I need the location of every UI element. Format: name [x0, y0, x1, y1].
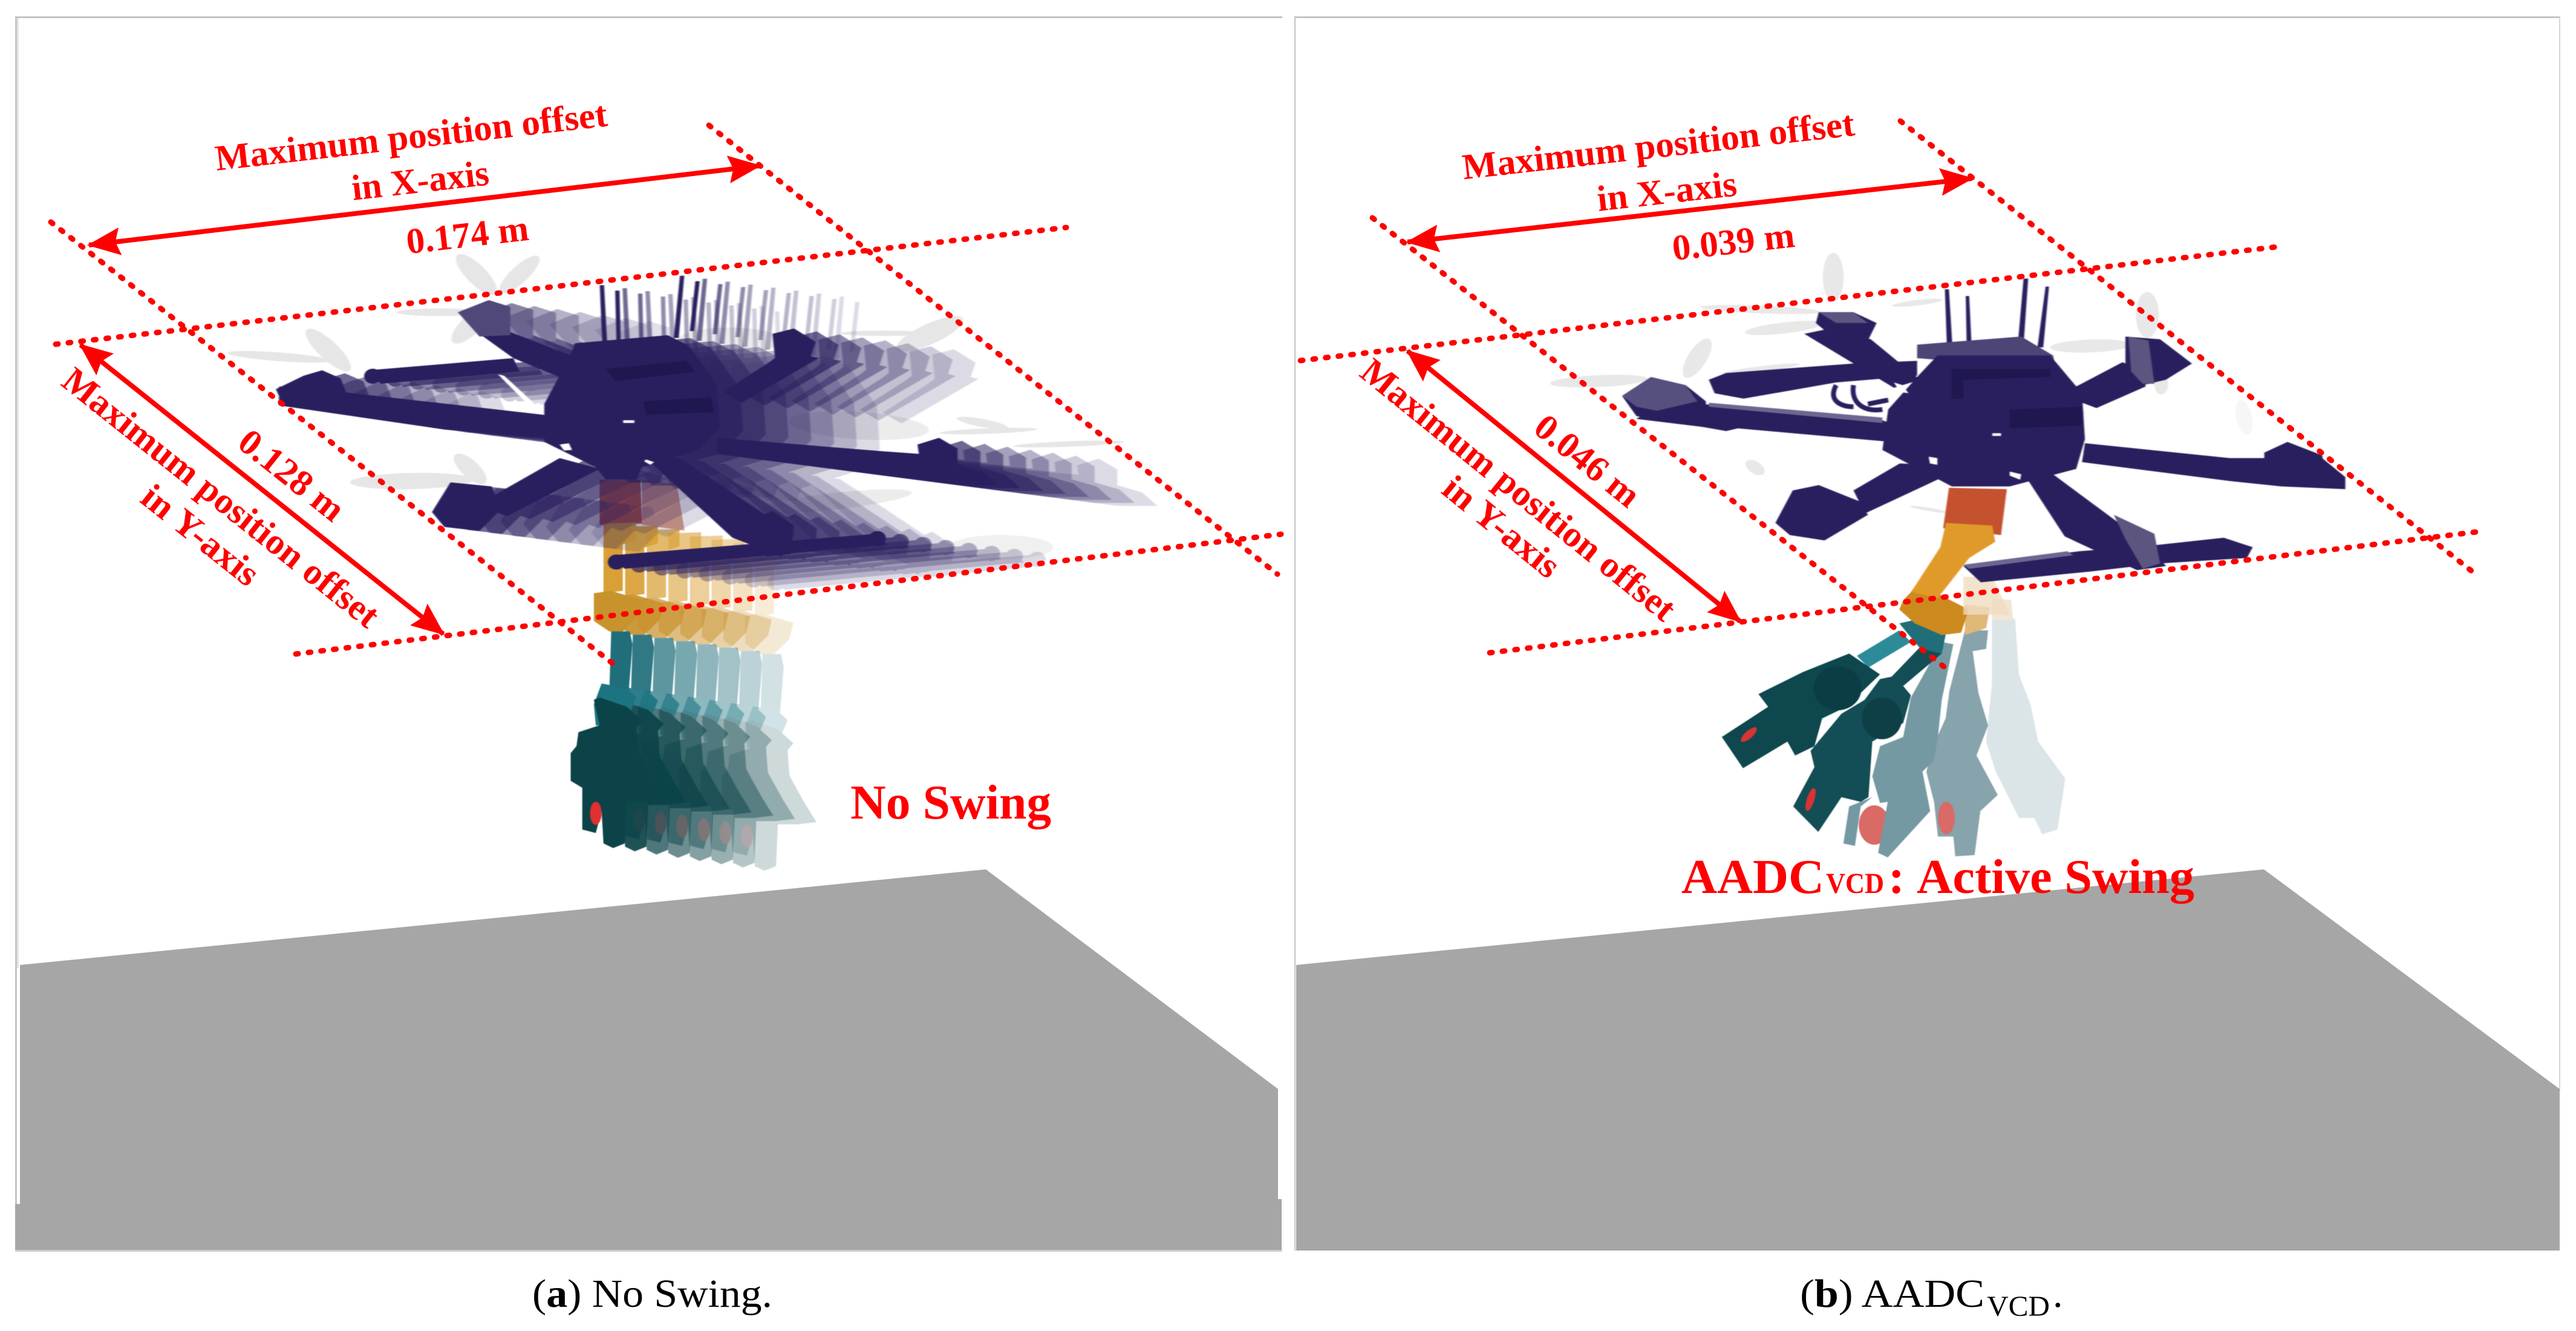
propeller blades b — [1548, 253, 2255, 514]
label: X offset a: Maximum position offset — [213, 94, 609, 178]
label: X offset a: in X-axis — [350, 152, 491, 208]
caption b: . — [2053, 1272, 2062, 1316]
label: X offset b: Maximum position offset — [1460, 103, 1856, 187]
arrow: Y offset b — [1407, 351, 1740, 621]
label: AADC VCD Active Swing: VCD — [1826, 868, 1884, 900]
gold joint — [1899, 584, 1969, 635]
frame 1 link — [1857, 630, 1911, 667]
arrow: X offset b — [1407, 178, 1972, 242]
label: Y offset a: 0.128 m — [231, 421, 353, 529]
arrow: X offset a — [89, 166, 760, 245]
robotic arm a: swing frames — [571, 480, 817, 871]
caption b: VCD — [1987, 1290, 2050, 1323]
frame 3 ball — [1859, 805, 1890, 845]
label: Y offset b: 0.046 m — [1527, 406, 1648, 515]
frame 3 — [1873, 642, 1954, 857]
caption b — [1800, 1272, 2062, 1323]
label: Y offset a: Maximum position offset — [55, 359, 387, 635]
label: AADC VCD Active Swing: AADC — [1681, 849, 1824, 904]
ground plane a — [15, 869, 1282, 1250]
arrow: Y offset a — [80, 345, 443, 634]
frame 5 pale — [1986, 619, 2066, 834]
drone b — [1622, 278, 2346, 615]
label: X offset a — [213, 94, 609, 261]
label: X offset b — [1460, 103, 1856, 268]
gold joint pale frames — [1965, 605, 1990, 635]
offset guide lines b — [1300, 121, 2482, 667]
label: Y offset a: in Y-axis — [134, 476, 267, 594]
caption b: (b) AADC — [1800, 1272, 1984, 1316]
propeller blades a — [226, 252, 1124, 560]
panel a: no swing simulation — [15, 16, 1282, 1252]
frame 4 — [1926, 630, 1998, 856]
label: AADC VCD Active Swing — [1681, 849, 2194, 904]
label: AADC VCD Active Swing: Active Swing — [1917, 849, 2194, 904]
label: AADC VCD Active Swing: : — [1888, 849, 1905, 904]
offset guide lines a — [51, 125, 1281, 667]
label: X offset a: 0.174 m — [404, 208, 530, 261]
ground plane b — [1296, 869, 2560, 1251]
robotic arm b: swing frames — [1722, 584, 2066, 857]
caption a: (a) No Swing. — [532, 1272, 772, 1316]
label: Y offset b: in Y-axis — [1435, 467, 1568, 586]
label: Y offset b: Maximum position offset — [1353, 350, 1684, 629]
drone a: motion ghost frames — [276, 276, 1158, 590]
frame 2 — [1793, 647, 1942, 832]
label: X offset b: 0.039 m — [1670, 215, 1796, 268]
frame 3 finger — [1844, 797, 1873, 846]
frame 4 ball — [1938, 802, 1955, 834]
panel b: AADC VCD simulation — [1294, 16, 2560, 1251]
label: No Swing: No Swing — [850, 775, 1051, 829]
frame 1 — [1722, 653, 1880, 768]
teal wrist — [1899, 620, 1946, 653]
label: X offset b: in X-axis — [1595, 163, 1739, 219]
